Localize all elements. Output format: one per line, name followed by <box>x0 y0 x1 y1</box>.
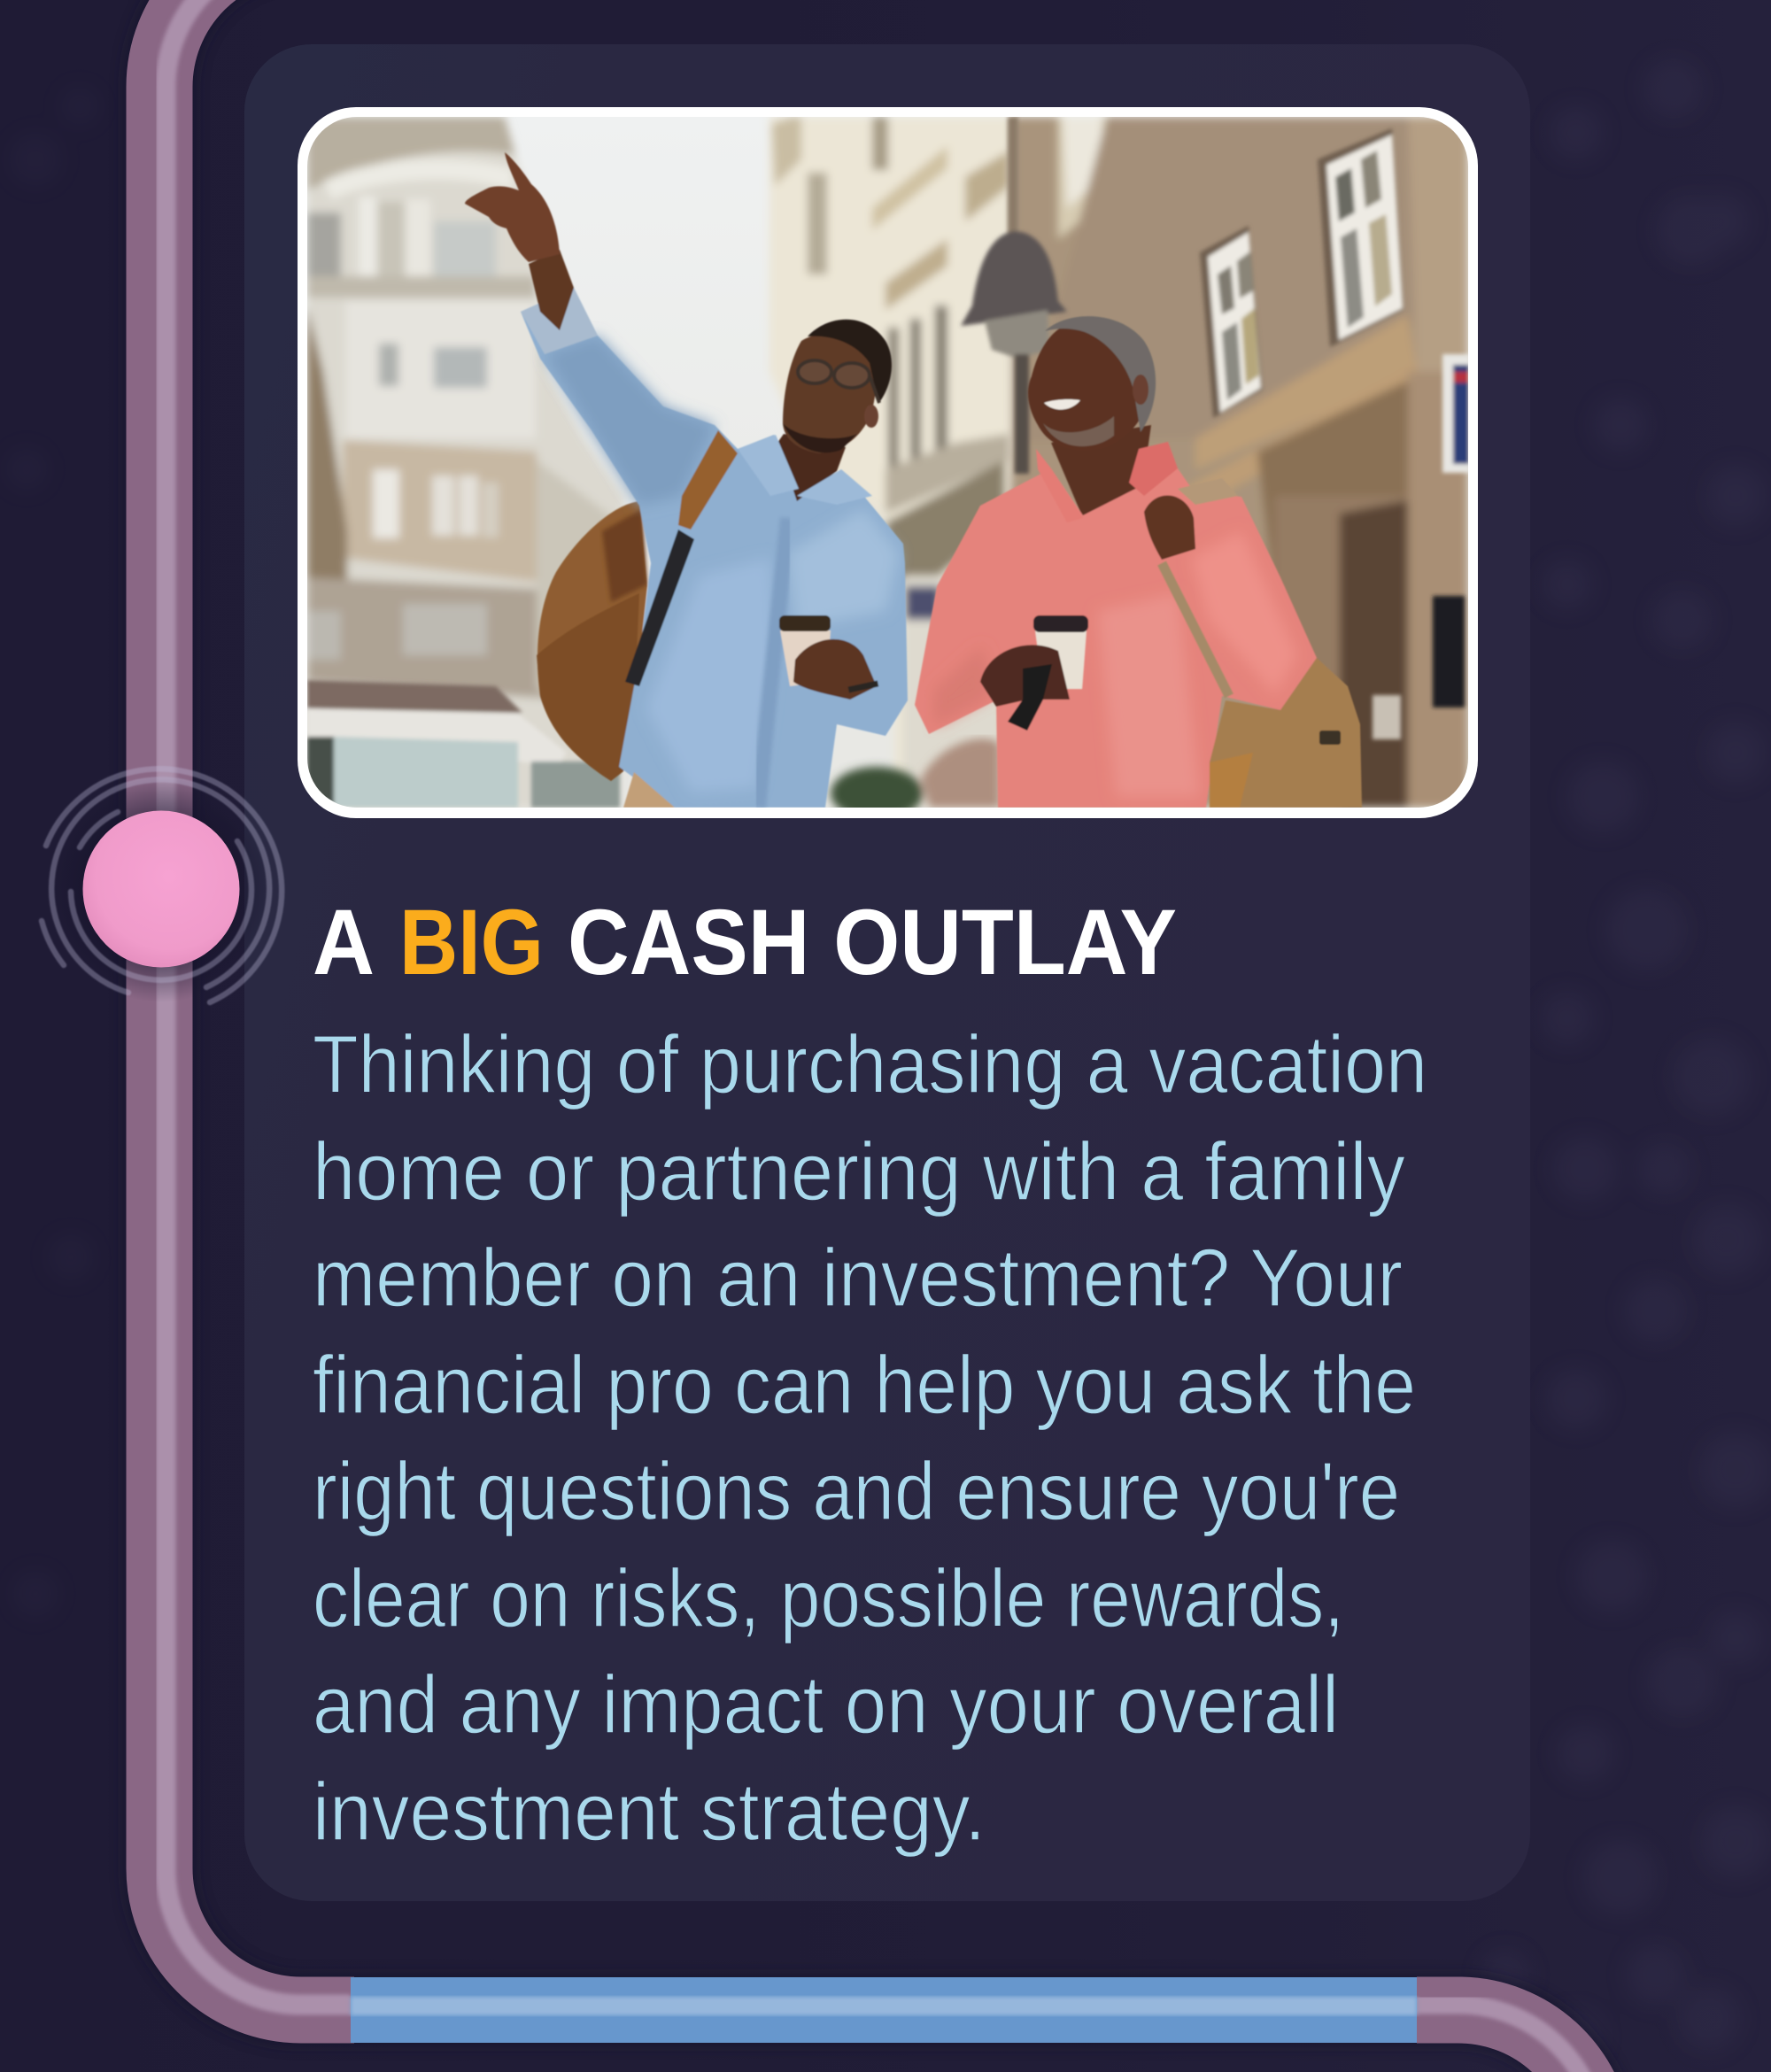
pulse rings <box>42 769 282 1002</box>
rail highlight <box>166 0 351 2005</box>
coffee cup <box>780 630 831 686</box>
collar <box>1036 449 1083 522</box>
center cream building <box>769 117 1012 808</box>
backpack <box>537 501 647 781</box>
beard <box>783 423 857 452</box>
sunglasses <box>1008 664 1052 731</box>
coffee cup <box>1035 630 1087 689</box>
forearm and hand <box>529 250 574 330</box>
shoulder bag <box>1210 658 1362 808</box>
heading words: CASH OUTLAY: CASH OUTLAY <box>568 891 1177 994</box>
ear <box>864 405 878 428</box>
windows, signs and street lamp <box>961 117 1471 739</box>
rail right curve <box>1417 2010 1600 2072</box>
storefront <box>307 680 620 808</box>
left building <box>307 117 623 808</box>
neck <box>1051 425 1151 518</box>
body text: home or partnering with a family <box>313 1125 1405 1218</box>
rail right highlight <box>1417 2005 1600 2072</box>
photo: two men on a city street <box>298 107 1478 820</box>
body text: financial pro can help you ask the <box>313 1339 1416 1431</box>
shirt <box>915 442 1317 808</box>
blue rail segment <box>351 1977 1417 2043</box>
panel <box>244 44 1530 1901</box>
hair <box>808 320 892 404</box>
bag strap <box>1162 563 1229 696</box>
body text <box>313 1018 1427 1858</box>
rail top curve and vertical <box>159 0 354 2010</box>
button placket <box>758 518 788 808</box>
head <box>1028 321 1148 451</box>
right tan building <box>1001 117 1468 808</box>
man in pink shirt <box>915 316 1362 808</box>
body text: clear on risks, possible rewards, <box>313 1552 1344 1644</box>
watch <box>848 681 878 692</box>
hand on strap <box>1144 496 1195 560</box>
heading word: BIG: BIG <box>399 891 544 994</box>
head <box>783 334 876 453</box>
bush and passerby <box>831 738 1000 820</box>
pants <box>623 772 675 808</box>
body text: and any impact on your overall <box>313 1658 1339 1751</box>
body text: right questions and ensure you're <box>313 1445 1400 1537</box>
collar <box>738 435 799 496</box>
heading word: A: A <box>313 891 375 994</box>
body text: investment strategy. <box>313 1766 986 1858</box>
smile <box>1044 399 1080 410</box>
neck <box>777 434 846 501</box>
timeline marker: pink ball <box>83 811 239 967</box>
glasses <box>798 360 879 403</box>
body text: member on an investment? Your <box>313 1232 1403 1324</box>
hand and wrist <box>793 639 877 700</box>
beard <box>1043 416 1114 446</box>
ear <box>1133 375 1148 405</box>
ball shadow halo <box>48 776 275 1002</box>
sky <box>307 117 1468 808</box>
hand with cup <box>980 645 1070 707</box>
backpack straps <box>678 430 738 530</box>
body text: Thinking of purchasing a vacation <box>313 1018 1427 1110</box>
shirt <box>521 288 908 808</box>
heading <box>313 891 1177 994</box>
hair <box>1045 316 1156 432</box>
man in blue shirt <box>465 152 908 808</box>
photo white frame <box>298 107 1478 818</box>
